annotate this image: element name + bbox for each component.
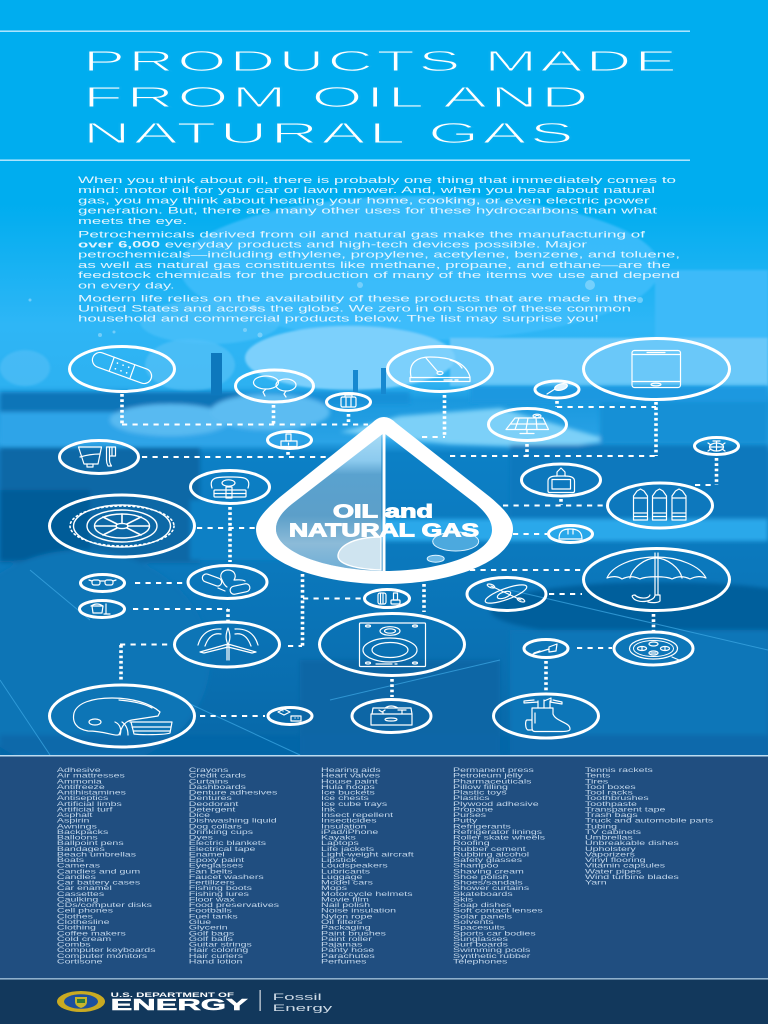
product list columns: Curtains — [189, 777, 229, 785]
product list columns: Detergent — [189, 806, 236, 813]
intro text: feedstock chemicals for the production of many of the items we use and depend — [78, 269, 680, 280]
product list columns: Credit cards — [189, 772, 247, 779]
product list columns: Panty hose — [321, 946, 374, 954]
product list columns: Backpacks — [57, 828, 109, 835]
icon: tablet — [584, 338, 730, 400]
product list columns: Vinyl flooring — [585, 856, 646, 864]
header rules — [0, 30, 690, 161]
product list columns: Toothpaste — [585, 800, 637, 807]
product list columns: Candies and gum — [57, 868, 140, 875]
product list columns: Skateboards — [453, 890, 513, 897]
product list columns: iPad/iPhone — [321, 828, 378, 835]
product list columns: Roller skate wheels — [453, 834, 546, 841]
product list columns: Perfumes — [321, 958, 367, 965]
product list columns: Dice — [189, 811, 210, 818]
product list columns: CDs/computer disks — [57, 901, 153, 909]
product list columns: Shoe polish — [453, 873, 509, 880]
product list columns: Noise insulation — [321, 907, 396, 914]
product list columns: Safety glasses — [453, 856, 523, 864]
product list columns: Nylon rope — [321, 913, 373, 920]
product list columns: Electric blankets — [189, 839, 267, 847]
icon: football helmet — [50, 685, 194, 747]
product list columns: Faucet washers — [189, 873, 264, 880]
product list columns: Glue — [189, 918, 211, 925]
product list columns: Swimming pools — [453, 946, 531, 954]
product list columns: Dog collars — [189, 822, 243, 830]
product list columns: Guitar strings — [189, 941, 253, 948]
product list columns: Golf bags — [189, 929, 235, 937]
product list columns: Water pipes — [585, 868, 642, 875]
product list columns: Purses — [453, 811, 487, 818]
product list columns: Tennis rackets — [585, 766, 654, 773]
product list columns: Lubricants — [321, 868, 371, 875]
product list columns: Denture adhesives — [189, 789, 278, 796]
product list columns: Dashboards — [189, 783, 247, 790]
product list columns: Rubber cement — [453, 845, 526, 852]
product list columns: Skis — [453, 896, 474, 903]
intro text: household and commercial products below. The list may surprise you! — [78, 313, 599, 324]
background: refinery photo with bubbles — [0, 0, 768, 770]
icon: nail polish — [268, 432, 312, 448]
product list columns: Plywood adhesive — [453, 800, 539, 807]
product list columns: Umbrellas — [585, 834, 634, 841]
product list columns: Awnings — [57, 822, 98, 830]
product list columns: Plastics — [453, 794, 490, 802]
intro text: petrochemicals—including ethylene, propylene, acetylene, benzene, and toluene, — [78, 249, 680, 260]
product list columns: Vitamin capsules — [585, 862, 666, 869]
product list columns: Fertilizers — [189, 879, 236, 886]
product list columns: Dishwashing liquid — [189, 817, 277, 824]
product list columns: Surf boards — [453, 941, 509, 948]
logo: Fossil Energy: Fossil — [273, 992, 322, 1003]
dotted connectors — [120, 394, 716, 716]
title: PRODUCTS MADE — [83, 46, 680, 78]
product list columns: Ice chests — [321, 794, 370, 802]
product list columns: Soap dishes — [453, 901, 512, 909]
product list columns: Mops — [321, 884, 348, 892]
product list columns: Asphalt — [57, 811, 93, 818]
product list columns: Fishing lures — [189, 890, 250, 897]
product list columns: Light-weight aircraft — [321, 851, 414, 858]
title — [83, 46, 680, 150]
product list columns: Nail polish — [321, 901, 370, 909]
product list columns: Petroleum jelly — [453, 772, 523, 779]
product list columns: Vaporizers — [585, 851, 636, 858]
product list columns: Lipstick — [321, 856, 357, 864]
product list panel — [0, 755, 768, 978]
logo: U.S. Department of Energy — [111, 992, 248, 1014]
icon: paint brush — [524, 640, 568, 658]
product list columns: Clothing — [57, 924, 96, 931]
product list columns: Roofing — [453, 839, 490, 847]
product list columns: Fishing boots — [189, 884, 253, 892]
title: NATURAL GAS — [83, 118, 577, 150]
intro text: over 6,000 everyday products and high-tech devices possible. Major — [78, 238, 587, 250]
product list columns: Sports car bodies — [453, 929, 536, 937]
product list columns: Cameras — [57, 862, 101, 869]
icon: balloons — [236, 370, 314, 402]
product list columns: Footballs — [189, 907, 233, 914]
product list columns: Ice cube trays — [321, 800, 388, 807]
product list columns: Putty — [453, 817, 478, 824]
product list columns: Permanent press — [453, 766, 535, 773]
product list columns: Ballpoint pens — [57, 839, 124, 847]
product list columns: Truck and automobile parts — [585, 817, 714, 824]
drop label: NATURAL GAS — [289, 520, 479, 540]
product list columns: Toothbrushes — [585, 794, 649, 802]
product list columns: Plastic toys — [453, 789, 507, 796]
icon: cosmetics — [364, 590, 410, 608]
product list columns: Artificial turf — [57, 806, 113, 813]
product list columns: Synthetic rubber — [453, 952, 530, 959]
product list columns: Cassettes — [57, 890, 105, 897]
product list columns: Tires — [585, 777, 609, 785]
intro text: mind: motor oil for your car or lawn mower. And, when you hear about natural — [78, 184, 655, 195]
product list columns: Kayaks — [321, 834, 357, 841]
product list columns: Cell phones — [57, 907, 114, 914]
icon: pills — [188, 566, 267, 598]
logo: Fossil Energy: Energy — [273, 1003, 333, 1014]
product list columns: Motorcycle helmets — [321, 890, 413, 897]
icon: hard hat — [548, 526, 592, 542]
footer bar — [0, 978, 768, 1024]
product list columns: Insecticides — [321, 817, 377, 824]
product list columns: Shower curtains — [453, 884, 530, 892]
product list columns: Electrical tape — [189, 845, 256, 852]
product list columns: Bandages — [57, 845, 106, 852]
product list columns: Adhesive — [57, 766, 101, 773]
product list columns: Insect repellent — [321, 811, 394, 818]
product list columns: Solar panels — [453, 913, 513, 920]
intro text: on every day. — [78, 279, 174, 290]
product list columns: Hair curlers — [189, 952, 244, 959]
product list columns: Hair coloring — [189, 946, 248, 954]
product list columns: Tool racks — [585, 789, 634, 796]
product list columns: Soft contact lenses — [453, 907, 543, 914]
product list columns: Computer monitors — [57, 952, 148, 959]
product list columns: Trash bags — [585, 811, 638, 818]
product list columns: Pharmaceuticals — [453, 777, 532, 785]
product list columns: Boats — [57, 856, 85, 864]
product list columns: Rubbing alcohol — [453, 851, 529, 858]
product list columns: Crayons — [189, 766, 229, 773]
product list columns: Pillow filling — [453, 783, 508, 790]
product list columns: Fan belts — [189, 868, 233, 875]
product list columns: Pajamas — [321, 941, 363, 948]
product list columns: Balloons — [57, 834, 98, 841]
product list columns: Car enamel — [57, 884, 112, 892]
product list columns: Combs — [57, 941, 91, 948]
product list columns: Cold cream — [57, 935, 111, 942]
product list columns: Movie film — [321, 896, 369, 903]
product list columns: Shampoo — [453, 862, 499, 869]
product list columns: Artificial limbs — [57, 800, 123, 807]
product list columns: Luggage — [321, 873, 363, 880]
product list columns: Packaging — [321, 924, 371, 931]
icon: solar panel — [488, 408, 566, 440]
product list columns: Sunglasses — [453, 935, 509, 942]
drop label — [289, 502, 479, 540]
intro text: gas, you may think about heating your home, cooking, or even electric power — [78, 194, 650, 205]
product list columns: Hearing aids — [321, 766, 381, 773]
product list columns: Coffee makers — [57, 929, 127, 937]
product list columns: Caulking — [57, 896, 98, 903]
icon: toothpaste and toothbrush — [60, 440, 138, 474]
product list columns: TV cabinets — [585, 828, 642, 835]
product list columns: Candles — [57, 873, 97, 880]
intro text: meets the eye. — [78, 215, 187, 226]
product list columns: Clothesline — [57, 918, 110, 925]
product list columns: Tubing — [585, 822, 617, 830]
intro text: United States and across the globe. We zero in on some of these common — [78, 302, 631, 314]
product list columns: Upholstery — [585, 845, 636, 852]
product list columns: Drinking cups — [189, 828, 254, 835]
icon: umbrella — [584, 548, 730, 610]
intro text: as well as natural gas constituents like methane, propane, and ethane—are the — [78, 259, 671, 270]
icon: toolbox — [352, 700, 431, 732]
icon: wind turbine — [174, 622, 280, 667]
icon: tennis racket — [535, 381, 579, 398]
product list columns: Spacesuits — [453, 924, 506, 931]
icon: crayons — [608, 483, 712, 528]
product list columns: Food preservatives — [189, 901, 280, 909]
intro text — [78, 174, 680, 324]
logo: U.S. Department of Energy: U.S. DEPARTMENT OF — [111, 992, 234, 999]
product list columns: Solvents — [453, 918, 494, 925]
product list columns — [57, 766, 714, 965]
product list columns: Loudspeakers — [321, 862, 389, 869]
icon: hard drive — [388, 346, 492, 392]
icon: bucket and mop — [80, 600, 124, 618]
product list columns: Shoes/sandals — [453, 879, 523, 886]
product list columns: Wind turbine blades — [585, 873, 680, 880]
product list columns: Golf balls — [189, 935, 234, 942]
product list columns: Deodorant — [189, 800, 239, 807]
intro text: When you think about oil, there is probably one thing that immediately comes to — [78, 174, 676, 185]
intro text: generation. But, there are many other uses for these hydrocarbons than what — [78, 205, 658, 216]
logo: U.S. Department of Energy: ENERGY — [111, 997, 248, 1014]
product list columns: Clothes — [57, 913, 94, 920]
product list columns: Epoxy paint — [189, 856, 245, 864]
product list columns: Laptops — [321, 839, 360, 847]
intro text: Petrochemicals derived from oil and natural gas make the manufacturing of — [78, 228, 646, 239]
centre drop: Oil and Natural Gas — [256, 417, 513, 584]
product list columns: Insulation — [321, 822, 367, 830]
product list columns: Tool boxes — [585, 783, 636, 790]
product list columns: Propane — [453, 806, 493, 813]
icon: glue bottle — [522, 464, 600, 496]
product list columns: Paint roller — [321, 935, 372, 942]
icon: beetle pest — [694, 438, 738, 454]
product list columns: Oil filters — [321, 918, 363, 925]
icon: contact lenses — [614, 632, 693, 665]
product list columns: Transparent tape — [585, 806, 666, 813]
product list columns: Telephones — [453, 958, 508, 965]
product list columns: Tents — [585, 772, 611, 779]
product list columns: Antiseptics — [57, 794, 109, 802]
product list columns: Air mattresses — [57, 772, 126, 779]
product list columns: Paint brushes — [321, 929, 387, 937]
icon: eyeglasses — [80, 574, 124, 592]
icon: life jacket — [190, 470, 270, 504]
product list columns: Antifreeze — [57, 783, 105, 790]
product list columns: Beach umbrellas — [57, 851, 137, 858]
product list columns: Yarn — [585, 879, 607, 886]
icon: kayak — [467, 578, 546, 610]
product list columns: Hand lotion — [189, 958, 243, 965]
product list columns: Antihistamines — [57, 789, 127, 796]
drop label: OIL and — [333, 502, 433, 522]
product list columns: Ice buckets — [321, 789, 376, 796]
product list columns: Shaving cream — [453, 868, 524, 875]
product list columns: Eyeglasses — [189, 862, 244, 869]
icon: speaker — [320, 614, 464, 676]
product list columns: Parachutes — [321, 952, 376, 959]
logo: DOE seal — [57, 991, 105, 1012]
product list columns: Unbreakable dishes — [585, 839, 680, 847]
product list columns: Glycerin — [189, 924, 228, 931]
icon: credit cards — [268, 708, 312, 724]
product list columns: Fuel tanks — [189, 913, 238, 920]
product list columns: Car battery cases — [57, 879, 141, 886]
product list columns: Heart valves — [321, 772, 381, 779]
product list columns: House paint — [321, 777, 378, 785]
product list columns: Floor wax — [189, 896, 236, 903]
icon: tire — [50, 495, 194, 557]
logo: Fossil Energy — [273, 992, 333, 1014]
product list columns: Ammonia — [57, 777, 102, 785]
product list columns: Enamel — [189, 851, 225, 858]
product list columns: Refrigerants — [453, 822, 512, 830]
product list columns: Life jackets — [321, 845, 375, 852]
icon: bandage — [70, 346, 174, 392]
product list columns: Dentures — [189, 794, 233, 802]
product list columns: Cortisone — [57, 958, 103, 965]
product list columns: Ink — [321, 806, 336, 813]
icon: luggage — [326, 394, 370, 410]
intro text: Modern life relies on the availability of these products that are made in the — [78, 292, 637, 303]
product list columns: Computer keyboards — [57, 946, 156, 954]
title: FROM OIL AND — [83, 82, 592, 114]
product list columns: Model cars — [321, 879, 374, 886]
product list columns: Hula hoops — [321, 783, 376, 790]
icon: golf bag — [494, 694, 598, 738]
product list columns: Aspirin — [57, 817, 90, 824]
product list columns: Refrigerator linings — [453, 828, 543, 835]
product list columns: Dyes — [189, 834, 214, 841]
